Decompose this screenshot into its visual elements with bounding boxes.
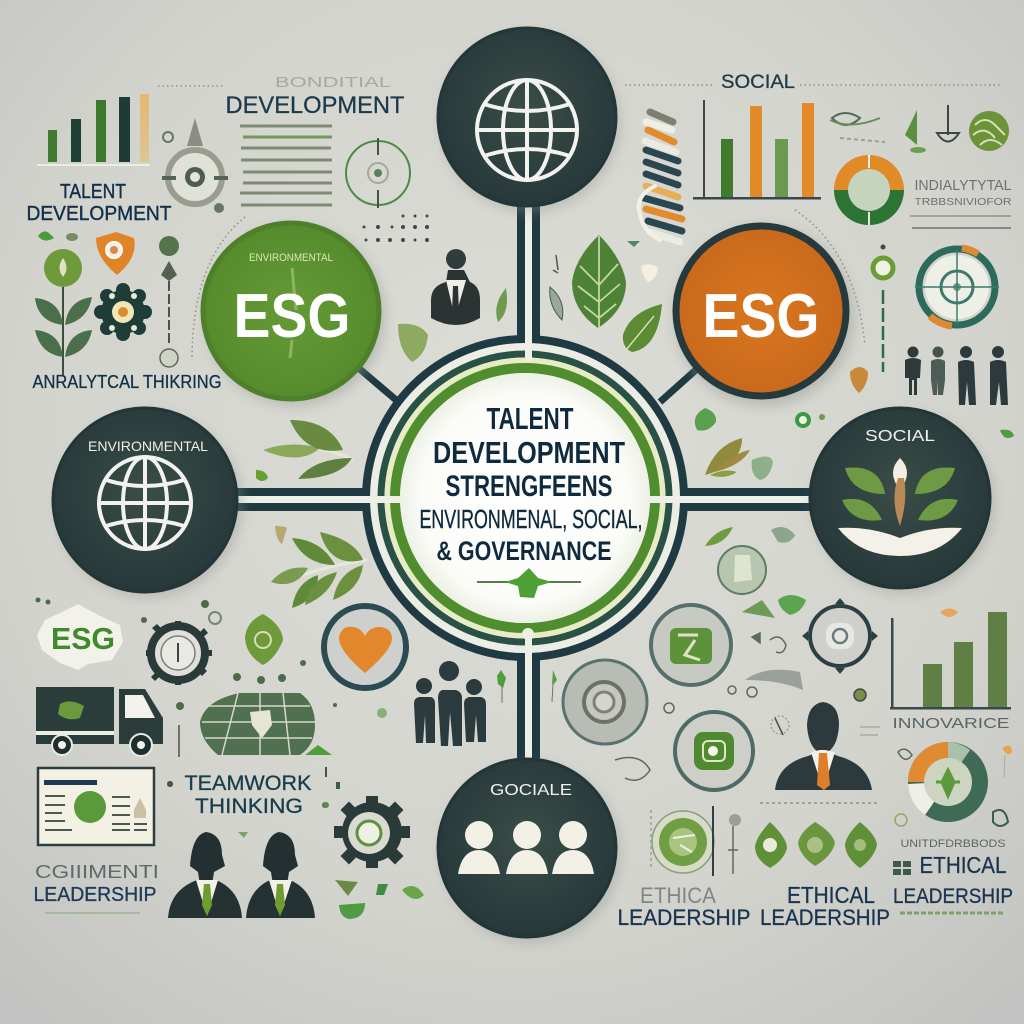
text: ethical leadership right: LEADERSHIP (893, 885, 1013, 908)
icon: two suited leaders (168, 832, 315, 918)
label: environmental small: ENVIRONMENTAL (249, 252, 333, 264)
icon: small mark (893, 861, 911, 875)
icon: small leaves near businessman (398, 241, 658, 362)
text: commitment leadership: CGIIIMENTI (35, 862, 159, 882)
icon: green target (346, 138, 410, 208)
icon: plant in hands (838, 458, 962, 556)
connector: top circle to hub (517, 200, 540, 340)
people: group of three (414, 661, 486, 746)
circle: orange ESG (674, 226, 854, 406)
dots grid (362, 214, 429, 242)
donut: innovation (908, 742, 988, 822)
label: environmental: ENVIRONMENTAL (88, 438, 208, 454)
small icons: right edge (895, 746, 1012, 826)
ring icon: grey swirl (563, 660, 647, 744)
circle: environmental globe (53, 408, 242, 598)
small icons: left of hub (36, 470, 387, 838)
icon: green brain ball (969, 111, 1009, 151)
ring icon: green shield (675, 712, 753, 790)
connector: green ESG to hub (355, 365, 402, 405)
hub title: TALENT (486, 401, 574, 436)
label: ESG: ESG (234, 282, 350, 351)
text: teamwork thinking: TEAMWORK (184, 772, 312, 795)
icon: globe (99, 457, 191, 549)
label: social: SOCIAL (865, 428, 935, 445)
icon: heart circle (324, 606, 406, 688)
icon: radial target (915, 248, 999, 326)
icon: arrow pin line (159, 236, 179, 367)
badge: ESG (37, 604, 123, 670)
connector: orange ESG to hub (660, 368, 698, 402)
faint heading: BONDITIAL (275, 74, 391, 91)
text: innovarice: INNOVARICE (892, 715, 1010, 732)
circle: social plant (810, 408, 995, 594)
icon: dark flower (94, 283, 152, 341)
label: ESG: ESG (702, 282, 820, 351)
hub title: STRENGFEENS (446, 470, 612, 503)
line: faint green rule (45, 912, 140, 914)
circle: green ESG (203, 223, 385, 406)
central hub (362, 335, 690, 662)
connector: right circle to hub (678, 488, 818, 511)
text: analytical grey: INDIALYTYTAL (914, 177, 1012, 194)
icon: gear with arrow (162, 118, 228, 213)
hub title (420, 401, 642, 566)
circle: bottom people (438, 759, 621, 943)
text: ethical grey: ETHICA (640, 883, 716, 908)
icon: presentation screen (38, 768, 154, 845)
icons: small green marks (38, 231, 78, 241)
circle: top globe (438, 28, 620, 212)
label: sociale: GOCIALE (490, 782, 572, 799)
bar chart: innovation (890, 608, 1011, 710)
donut: orange green (834, 155, 904, 225)
text: small caption: UNITDFDRBBODS (900, 838, 1006, 850)
icon: gear clock (146, 621, 212, 685)
icon: map globe (178, 693, 332, 757)
hub divider with leaf (477, 568, 581, 598)
connector: left circle to hub (232, 488, 372, 511)
hub title: DEVELOPMENT (433, 435, 625, 470)
icon: globe (477, 80, 577, 180)
lines: rules (910, 216, 1011, 228)
text: ethical mid: ETHICAL (787, 882, 875, 908)
people row (905, 346, 1008, 405)
ring icon: green square (651, 605, 731, 685)
text: talent development (26, 181, 172, 225)
dotted arcs (158, 85, 1002, 360)
hub title: ENVIRONMENAL, SOCIAL, (420, 504, 642, 534)
ring icon: dark studded (802, 598, 878, 674)
icon: orange pin (96, 232, 135, 275)
small leaves under gear (335, 880, 424, 919)
bar chart: social (693, 100, 821, 200)
icons: small green sprouts (497, 670, 557, 703)
icon: big leaf (572, 235, 626, 328)
icon: leaf branch upper (263, 420, 353, 479)
icon: truck (36, 687, 163, 756)
icon: businessman orange tie (775, 702, 872, 790)
line: faint green caption (900, 912, 1005, 914)
text: commitment leadership (34, 862, 159, 906)
heading: social: SOCIAL (721, 72, 795, 93)
icon: helix (639, 112, 682, 242)
text: leadership pair: LEADERSHIP (760, 905, 890, 930)
text: talent development: DEVELOPMENT (26, 203, 172, 225)
text: ethical leadership right: ETHICAL (920, 852, 1007, 878)
rule: faint (760, 802, 880, 804)
icon: pin with cross (728, 814, 741, 874)
icon: orange gem (850, 367, 868, 393)
icon: small leaf (623, 304, 662, 352)
icons: three green leaf badges (755, 822, 877, 868)
icon: green leaf badge (245, 614, 283, 665)
lines: text placeholder (240, 126, 332, 205)
icon: leaf branch lower (271, 532, 367, 608)
small icons: right of hub (695, 408, 1014, 618)
text: analytical thinking: ANRALYTCAL THIKRING (32, 372, 222, 392)
heading: development: DEVELOPMENT (226, 92, 405, 119)
icon: three people (458, 821, 594, 874)
icons: top right small (830, 105, 959, 153)
text: teamwork thinking: THINKING (195, 795, 303, 818)
icon: gear (334, 796, 410, 868)
text: talent development: TALENT (60, 181, 126, 203)
bar chart: top left (37, 94, 150, 166)
text: ethical leadership right (893, 852, 1013, 908)
text: commitment leadership: LEADERSHIP (34, 884, 156, 906)
hub title: & GOVERNANCE (436, 536, 612, 566)
small sketch icons: center right (615, 633, 880, 780)
text: leadership pair: LEADERSHIP (618, 905, 750, 930)
connector: bottom circle to hub (517, 655, 540, 765)
text: analytical grey (914, 177, 1012, 208)
icon: green pin line (873, 244, 893, 372)
text: teamwork thinking (184, 772, 312, 818)
text: analytical grey: TRBBSNIVIOFOR (914, 197, 1012, 208)
text: leadership pair (618, 905, 890, 930)
badge: ESG: ESG (51, 621, 115, 656)
icon: plant with leaf badge (35, 249, 92, 375)
small marks beside teamwork (167, 767, 340, 808)
icon: green swirl medallion (651, 806, 714, 876)
icon: businessman silhouette (431, 249, 480, 325)
